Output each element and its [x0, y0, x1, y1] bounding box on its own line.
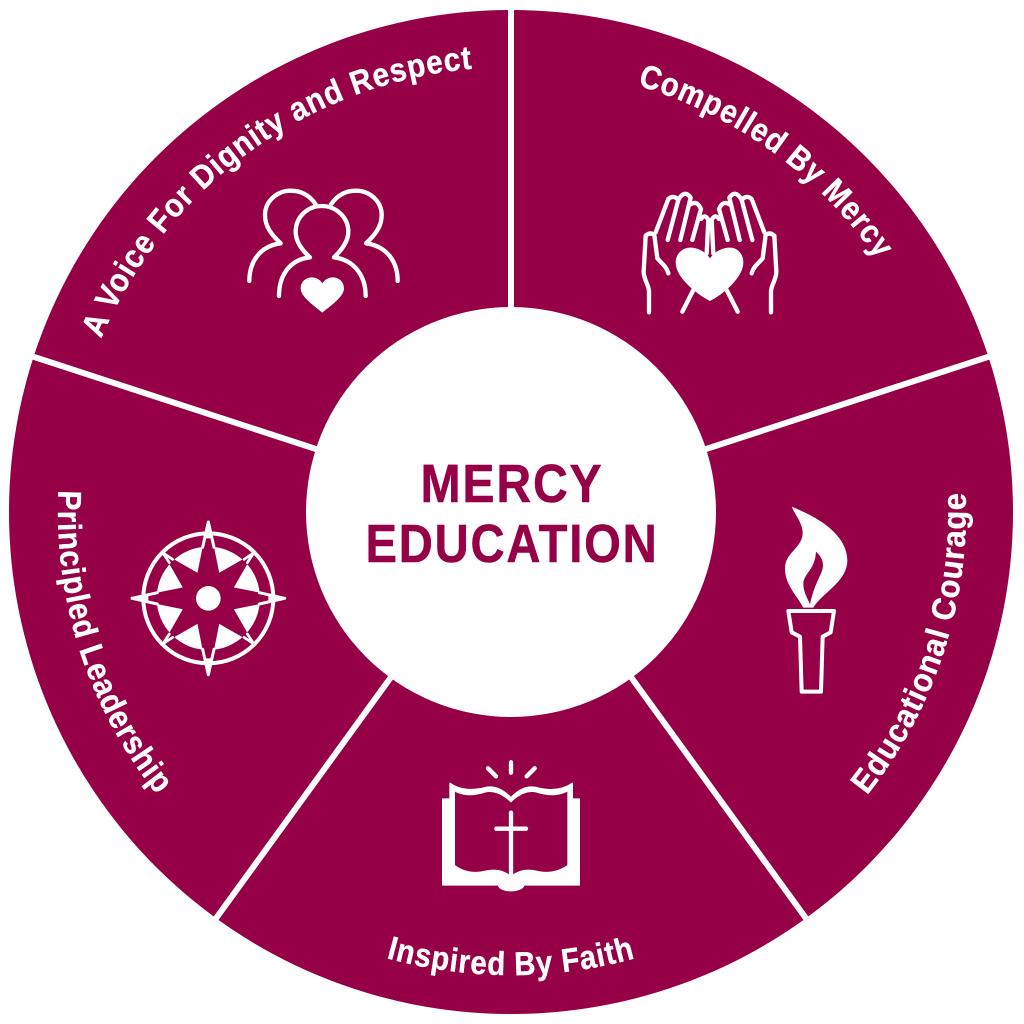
title: [366, 454, 658, 574]
title: EDUCATION: [366, 514, 658, 574]
title: MERCY: [420, 454, 604, 514]
icon: torch: [785, 507, 847, 692]
center circle: [306, 307, 716, 717]
label: A Voice For Dignity and Respect: A Voice For Dignity and Respect: [84, 47, 472, 338]
label: Educational Courage: Educational Courage: [850, 494, 973, 794]
label: Principled Leadership: Principled Leadership: [56, 492, 168, 792]
label: Inspired By Faith: Inspired By Faith: [388, 936, 634, 982]
icon: hands holding heart: [644, 194, 776, 312]
icon: open bible with cross: [443, 762, 579, 891]
label: Compelled By Mercy: Compelled By Mercy: [640, 66, 892, 256]
icon: compass rose: [131, 521, 287, 677]
icon: people with heart: [249, 191, 398, 313]
